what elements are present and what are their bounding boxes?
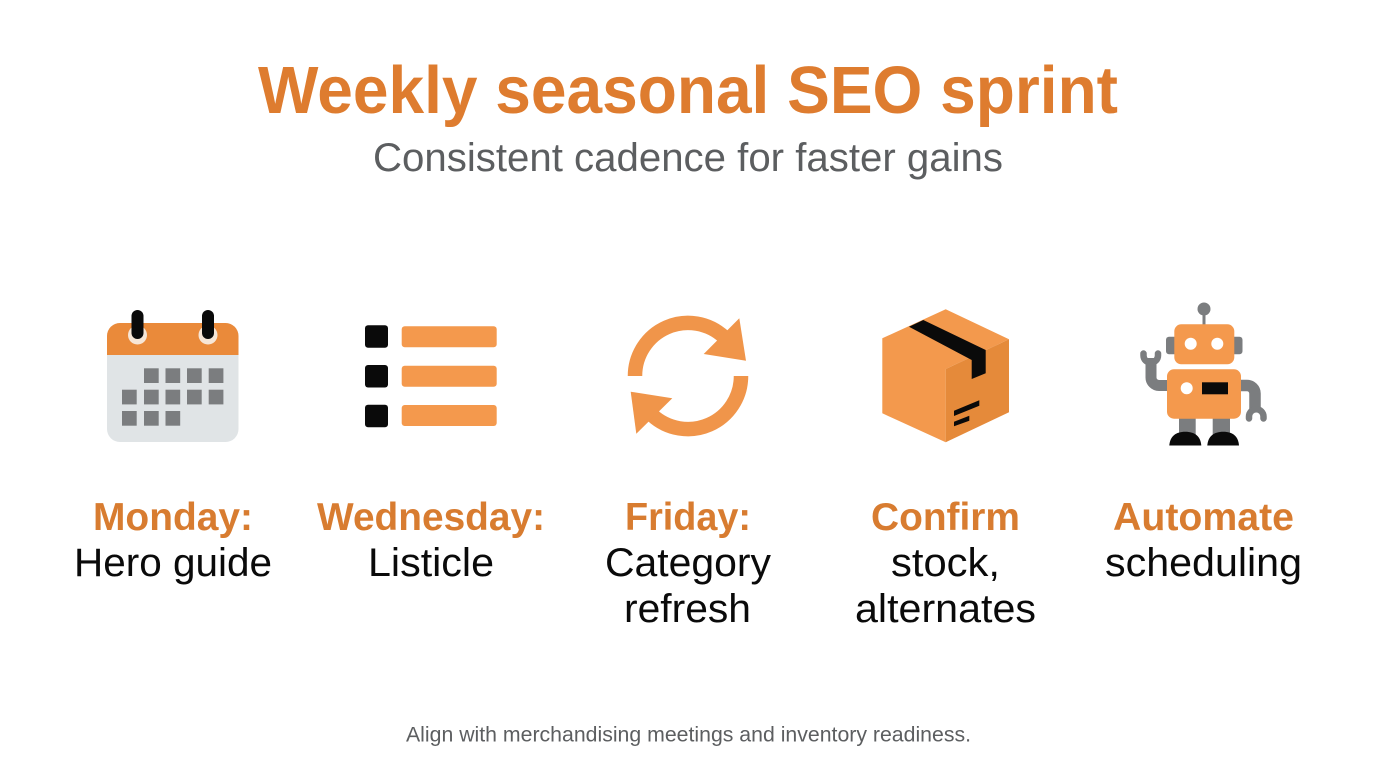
label: Automate bbox=[1105, 496, 1302, 585]
icon: robot bbox=[1144, 302, 1264, 446]
label: Friday bbox=[605, 496, 771, 631]
icon: shipping box bbox=[882, 309, 1009, 442]
label: Confirm: alternates bbox=[855, 587, 1036, 631]
label: Wednesday bbox=[317, 496, 545, 585]
icon: calendar bbox=[107, 310, 238, 442]
label: Monday: Hero guide bbox=[74, 541, 272, 585]
label: Friday: refresh bbox=[624, 587, 751, 631]
label: Confirm: Confirm bbox=[871, 496, 1020, 539]
label: Confirm: stock, bbox=[891, 541, 1000, 585]
label: Monday bbox=[74, 496, 272, 585]
icon: refresh arrows bbox=[631, 318, 746, 434]
label: Friday: Category bbox=[605, 541, 771, 585]
title: Weekly seasonal SEO sprint bbox=[258, 53, 1118, 128]
icon: checklist bbox=[365, 325, 497, 427]
label: Automate: scheduling bbox=[1105, 541, 1302, 585]
label: Wednesday: Wednesday: bbox=[317, 496, 545, 539]
label: Monday: Monday: bbox=[93, 496, 253, 539]
label: Confirm bbox=[855, 496, 1036, 631]
label: Wednesday: Listicle bbox=[368, 541, 494, 585]
label: Friday: Friday: bbox=[625, 496, 751, 539]
subtitle: Consistent cadence for faster gains bbox=[373, 136, 1003, 180]
label: Automate: Automate bbox=[1113, 496, 1294, 539]
footer note: Align with merchandising meetings and inventory readiness. bbox=[406, 724, 971, 746]
